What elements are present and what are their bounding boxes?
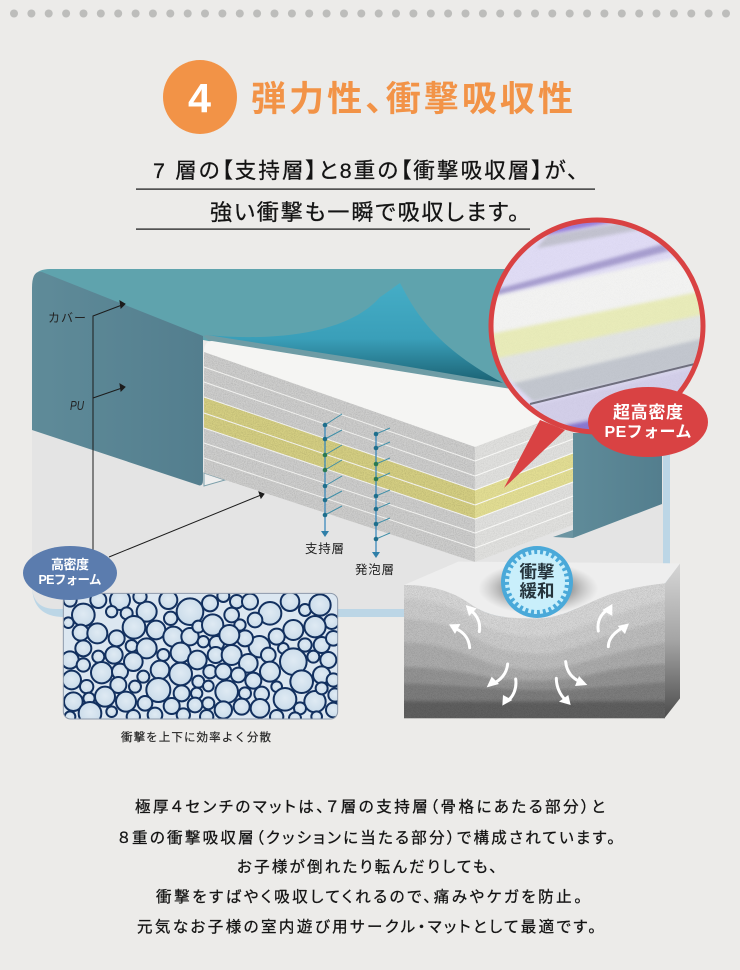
white foam band xyxy=(494,258,695,334)
dark crease xyxy=(530,363,700,404)
cover top surface xyxy=(34,269,530,400)
foam left face layers xyxy=(204,352,475,562)
number badge xyxy=(163,60,237,134)
lower lavender band xyxy=(534,369,690,424)
callout: high density PE foam: 高密度 xyxy=(51,557,89,572)
right cover wall xyxy=(553,433,662,538)
subtitle line 2: 強い衝撃も一瞬で吸収します。 xyxy=(210,200,519,225)
block top face xyxy=(404,562,680,618)
grey top band xyxy=(538,224,638,249)
shock relief badge xyxy=(501,546,573,618)
shock absorption block xyxy=(395,562,680,727)
white impact arrows xyxy=(455,609,624,701)
foam right face layers xyxy=(475,410,573,562)
foam layer pins xyxy=(372,428,390,558)
shadow band xyxy=(497,244,670,295)
number badge: 4 xyxy=(188,75,211,121)
foam panel caption: 衝撃を上下に効率よく分散 xyxy=(121,730,272,744)
purple foam edge xyxy=(565,418,590,430)
foam layer label: 発泡層 xyxy=(355,563,394,577)
body text: 極厚４センチのマットは、７層の支持層（骨格にあたる部分）と xyxy=(135,798,605,816)
callout: high density PE foam xyxy=(23,546,117,600)
leader arrows xyxy=(93,301,264,557)
floor panel xyxy=(32,395,740,617)
grey foam band xyxy=(499,316,700,383)
cover fold strip xyxy=(203,335,510,392)
support layer pins xyxy=(321,414,342,537)
body text: ８重の衝撃吸収層（クッションに当たる部分）で構成されています。 xyxy=(118,829,615,847)
foam microstructure panel xyxy=(61,590,342,725)
title: 弾力性、衝撃吸収性 xyxy=(251,80,573,119)
wall bottom fold xyxy=(204,473,225,486)
dotted top border xyxy=(10,10,730,18)
magnified foam circle xyxy=(487,213,710,437)
mattress cutaway diagram xyxy=(32,269,740,617)
arrow heads xyxy=(449,604,629,706)
subtitle line 1: 7 層の【支持層】と8重の【衝撃吸収層】が、 xyxy=(153,159,578,183)
body text xyxy=(118,798,615,936)
callout: ultra high density PE foam xyxy=(504,387,708,488)
shock relief badge: 緩和 xyxy=(520,581,554,601)
callout: high density PE foam: PEフォーム xyxy=(38,573,102,587)
yellow foam band xyxy=(490,289,710,360)
block front face bands xyxy=(404,584,665,718)
body text: 元気なお子様の室内遊び用サークル・マットとして最適です。 xyxy=(137,918,596,936)
block side face xyxy=(664,563,680,718)
PU label: PU xyxy=(70,398,84,413)
peeled cover underside xyxy=(207,283,505,384)
shock relief badge: 衝撃 xyxy=(520,562,554,582)
dent shadow xyxy=(478,562,598,614)
left cover wall xyxy=(32,272,203,485)
foam top surface xyxy=(204,341,560,447)
purple top layer xyxy=(546,222,610,236)
cover label: カバー xyxy=(48,311,86,325)
callout: ultra high density PE foam: PEフォーム xyxy=(604,424,692,441)
body text: 衝撃をすばやく吸収してくれるので、痛みやケガを防止。 xyxy=(156,888,582,906)
support layer label: 支持層 xyxy=(305,541,344,556)
body text: お子様が倒れたり転んだりしても、 xyxy=(237,858,497,876)
callout: ultra high density PE foam: 超高密度 xyxy=(613,402,683,422)
